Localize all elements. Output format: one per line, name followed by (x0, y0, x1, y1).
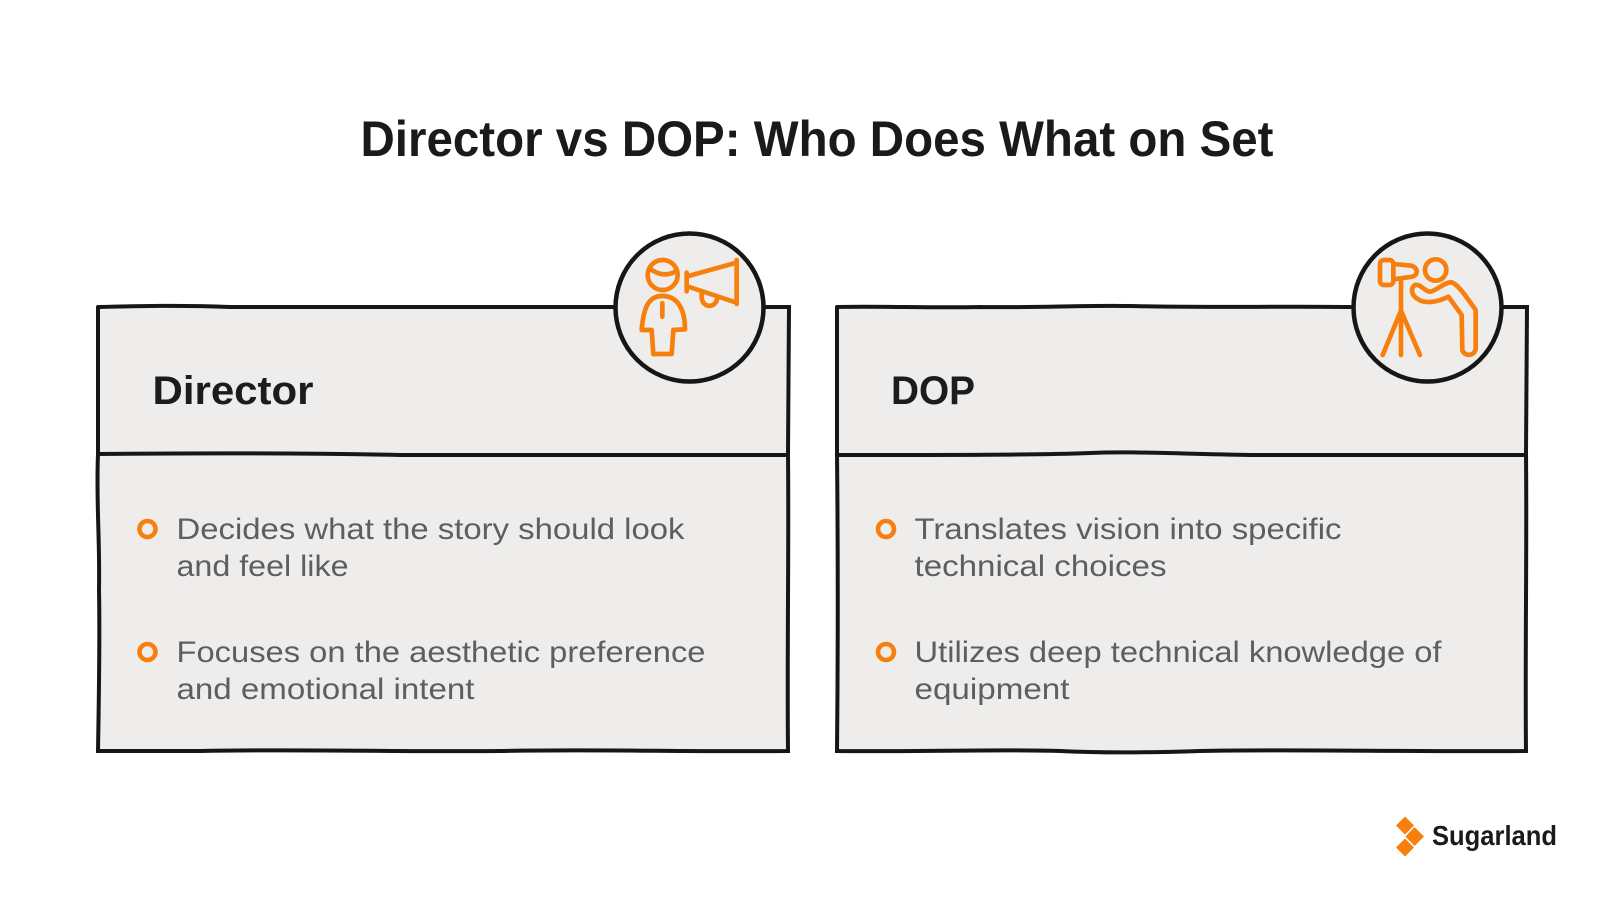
bullet 2: Utilizes deep technical knowledge of (914, 636, 1442, 669)
bullet 2 (140, 636, 706, 706)
bullet 1: Decides what the story should look (176, 513, 686, 546)
bullet 1: Translates vision into specific (914, 513, 1342, 546)
icon: logo diamonds (1396, 816, 1424, 856)
heading: Director: Director (152, 369, 314, 413)
heading: DOP: DOP (891, 369, 975, 413)
panel: DOP (837, 234, 1527, 752)
logo: Sugarland (1396, 816, 1557, 856)
bullet 2: Focuses on the aesthetic preference (176, 636, 706, 669)
bullet 1: and feel like (176, 550, 348, 583)
bullet 2: and emotional intent (176, 673, 475, 706)
divider (98, 453, 788, 455)
bullet 2 (878, 636, 1442, 706)
panel: Director (97, 234, 789, 751)
bullet 1 (140, 513, 686, 583)
bullet 1 (878, 513, 1342, 583)
bullet 1: technical choices (914, 550, 1166, 583)
title: Director vs DOP: Who Does What on Set (360, 111, 1274, 167)
icon: director with megaphone (616, 234, 764, 382)
icon: camera operator with tripod (1354, 234, 1502, 382)
logo: Sugarland: Sugarland (1432, 820, 1557, 851)
divider (837, 452, 1526, 455)
bullet 2: equipment (914, 673, 1070, 706)
